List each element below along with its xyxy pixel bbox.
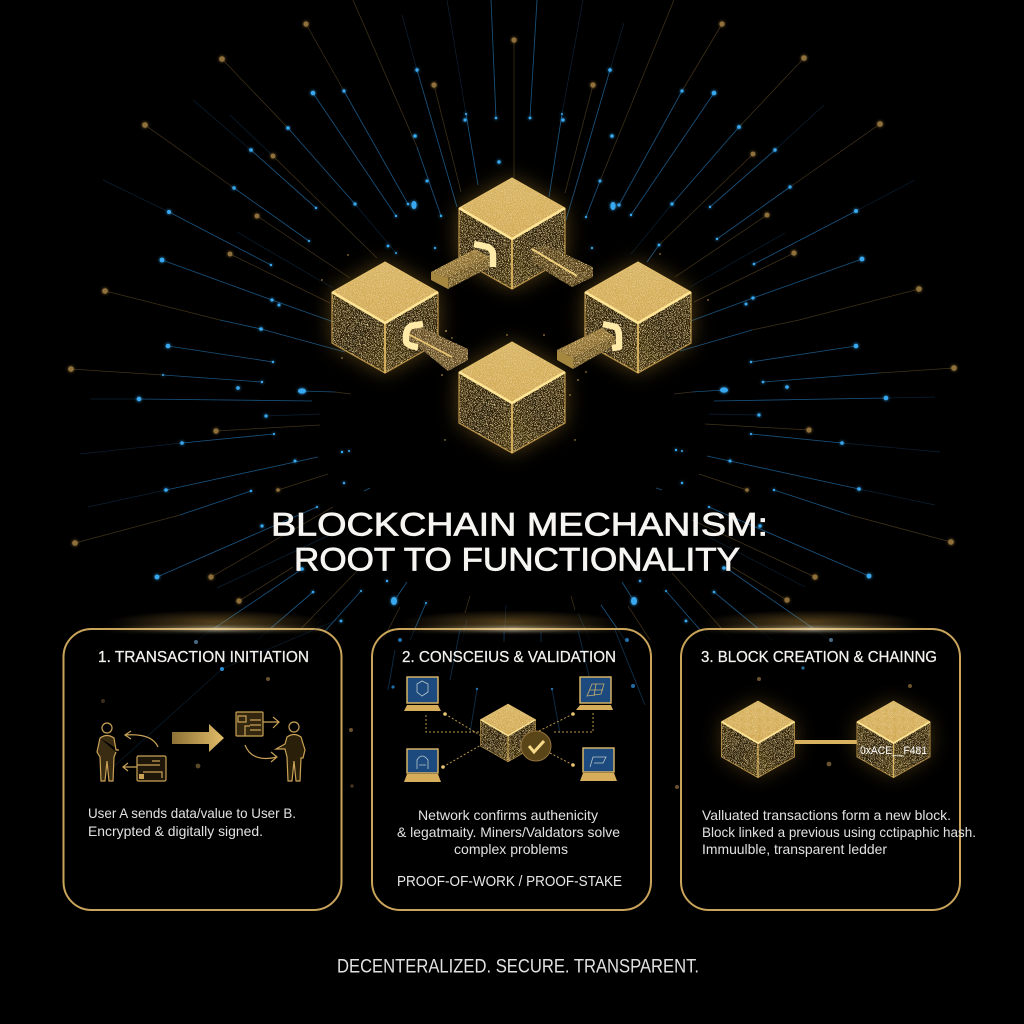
icon: user A — [97, 723, 119, 781]
footer tagline: DECENTERALIZED. SECURE. TRANSPARENT. — [337, 956, 699, 978]
icon: block glow — [722, 701, 930, 776]
cube: bottom — [459, 342, 565, 453]
dotted network links — [426, 712, 593, 769]
body text: Block linked a previous using cctipaphic hash. — [702, 824, 976, 840]
body text: Immuulble, transparent ledder — [702, 841, 887, 857]
radial network lines — [71, 0, 954, 640]
icon: arrow from document — [263, 717, 279, 728]
icon: block right — [857, 701, 930, 778]
glowing network nodes — [68, 21, 957, 622]
icon: laptop top left — [404, 677, 441, 711]
icon: laptop bottom right — [580, 748, 617, 781]
proof label: PROOF-OF-WORK / PROOF-STAKE — [397, 873, 622, 890]
icon: user B — [276, 722, 305, 781]
icon: data card — [137, 756, 166, 781]
title: ROOT TO FUNCTIONALITY — [294, 542, 740, 578]
body text: Encrypted & digitally signed. — [88, 823, 263, 839]
icon: chain link — [795, 740, 857, 744]
icon: curved arrow to user A — [125, 731, 158, 747]
background lines — [388, 630, 645, 733]
icon: arrow to user A from card — [123, 763, 137, 771]
connector: top cube to right cube — [532, 245, 593, 287]
connector: top cube to left cube — [431, 244, 493, 289]
faint background nodes — [101, 620, 354, 788]
heading: 2. CONSCEIUS & VALIDATION — [402, 649, 616, 666]
icon: laptop bottom left — [404, 749, 441, 782]
body text: Network confirms authenicity — [418, 807, 598, 823]
gold dust — [321, 253, 709, 441]
body text — [702, 807, 976, 857]
title: BLOCKCHAIN MECHANISM: — [271, 506, 768, 542]
icon: data document — [236, 712, 263, 736]
body text: User A sends data/value to User B. — [88, 805, 296, 821]
faint background nodes — [675, 638, 912, 789]
cube: right — [585, 262, 691, 373]
soft glow behind the cube cluster — [332, 178, 691, 453]
heading: 3. BLOCK CREATION & CHAINNG — [701, 649, 937, 666]
panel: block creation and chaining — [675, 610, 976, 910]
body text — [397, 807, 620, 857]
icon: laptop top right — [576, 677, 613, 710]
body text — [88, 805, 296, 839]
blockchain cube cluster — [321, 178, 709, 453]
panel: transaction initiation — [64, 610, 354, 910]
icon: curved arrow to user B — [245, 745, 277, 762]
body text: Valluated transactions form a new block. — [702, 807, 951, 823]
title — [271, 506, 768, 578]
icon: big arrow — [172, 724, 224, 752]
icon: central block — [480, 704, 536, 762]
hash label: 0xACE__F481 — [860, 745, 927, 757]
cube: top — [459, 178, 565, 289]
cube: left — [332, 262, 438, 373]
connector: left cube to bottom cube — [406, 324, 468, 371]
panel: consensus and validation — [372, 610, 651, 910]
icon: block left — [721, 701, 795, 778]
icon: check badge — [521, 731, 551, 761]
heading: 1. TRANSACTION INITIATION — [98, 649, 309, 666]
body text: & legatmaity. Miners/Valdators solve — [397, 824, 620, 840]
connector: right cube to bottom cube — [557, 324, 619, 369]
body text: complex problems — [454, 841, 568, 857]
